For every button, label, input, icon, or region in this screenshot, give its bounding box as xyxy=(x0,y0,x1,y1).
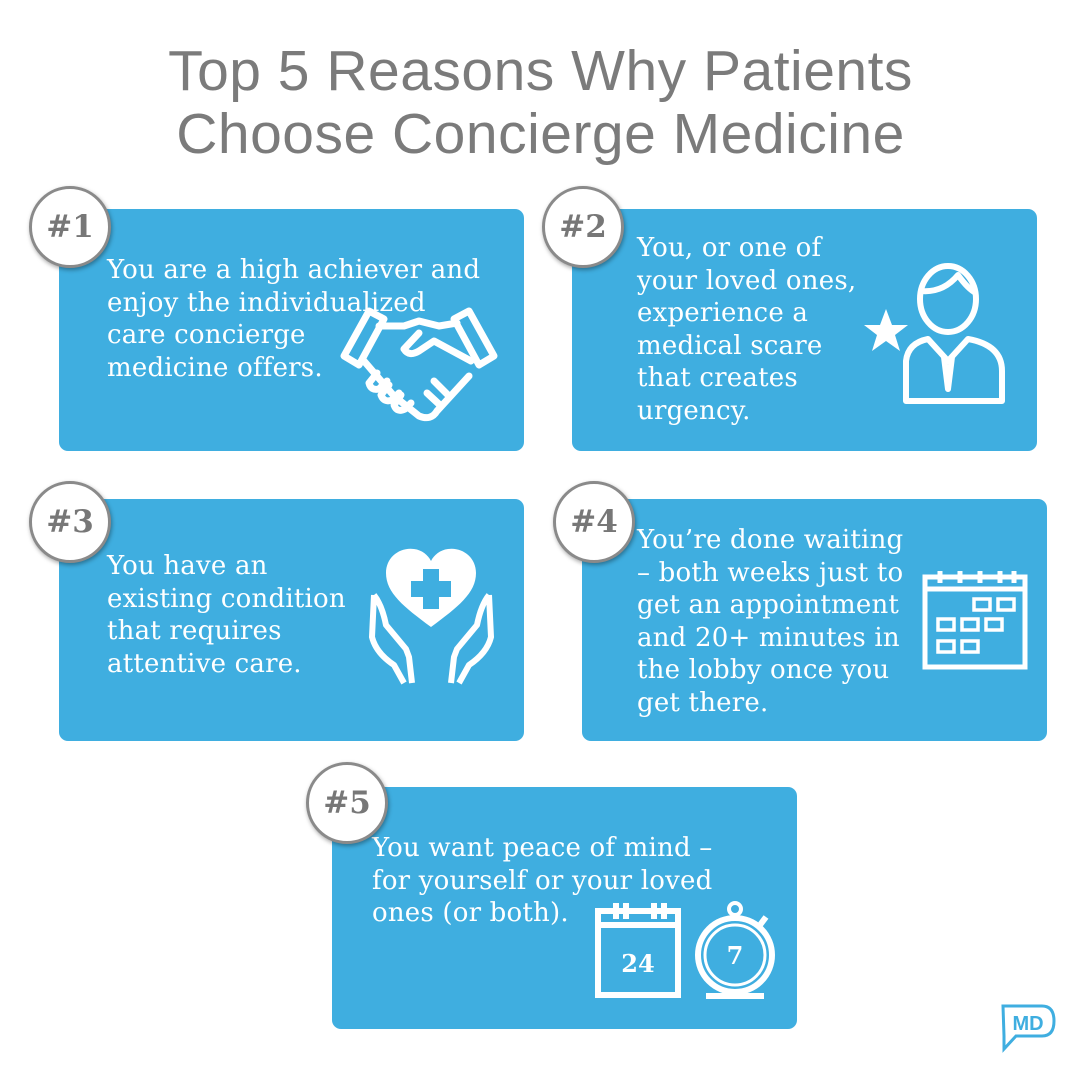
badge #2 xyxy=(542,186,624,268)
text: reason 5: ones (or both). xyxy=(372,898,569,928)
badge #5 xyxy=(306,762,388,844)
text: reason 4: the lobby once you xyxy=(637,655,889,685)
panel: reason 3 xyxy=(59,499,524,741)
badge #1 xyxy=(29,186,111,268)
text: reason 4: and 20+ minutes in xyxy=(637,622,900,652)
text: reason 4: You’re done waiting xyxy=(637,525,903,555)
logo: MD: MD xyxy=(1012,1013,1044,1035)
badge #1: #1 xyxy=(46,209,94,245)
text: reason 1: medicine offers. xyxy=(107,352,323,382)
text: reason 4: get an appointment xyxy=(637,590,899,620)
text: reason 3 xyxy=(106,551,346,678)
logo: MD xyxy=(1001,1004,1056,1053)
text: reason 4: get there. xyxy=(637,688,768,718)
panel: reason 4 xyxy=(582,499,1047,741)
text: reason 2: urgency. xyxy=(637,396,751,426)
text: reason 4 xyxy=(636,525,903,718)
icon: calendar xyxy=(922,571,1028,670)
badge #3: #3 xyxy=(46,504,94,540)
title xyxy=(168,39,913,166)
badge #4 xyxy=(553,481,635,563)
text: reason 5: You want peace of mind – xyxy=(372,833,712,863)
text: reason 3: existing condition xyxy=(107,584,346,614)
text: reason 5: for yourself or your loved xyxy=(372,866,712,896)
text: reason 2 xyxy=(636,233,856,426)
text: reason 2: medical scare xyxy=(637,330,822,360)
text: reason 1: care concierge xyxy=(107,320,306,350)
text: reason 2: your loved ones, xyxy=(637,266,856,296)
badge #5: #5 xyxy=(323,785,371,821)
text: reason 3: attentive care. xyxy=(107,648,302,678)
panel: reason 1 xyxy=(59,209,524,451)
icon: 24/7 calendar and stopwatch: 7 xyxy=(727,941,743,970)
badge #3 xyxy=(29,481,111,563)
icon: heart in hands xyxy=(369,548,494,684)
badge #2: #2 xyxy=(559,209,607,245)
text: reason 3: that requires xyxy=(107,616,282,646)
icon: handshake xyxy=(340,308,498,422)
text: reason 2: You, or one of xyxy=(637,233,821,263)
title: Top 5 Reasons Why Patients xyxy=(168,39,913,103)
icon: 24/7 calendar and stopwatch: 24 xyxy=(621,949,655,978)
text: reason 1: You are a high achiever and xyxy=(107,255,480,285)
text: reason 1 xyxy=(106,255,480,382)
badge #4: #4 xyxy=(570,504,618,540)
panel: reason 2 xyxy=(572,209,1037,451)
text: reason 5 xyxy=(372,833,712,928)
text: reason 2: experience a xyxy=(637,298,808,328)
text: reason 4: – both weeks just to xyxy=(637,558,903,588)
title: Choose Concierge Medicine xyxy=(176,102,905,166)
panel: reason 5 xyxy=(332,787,797,1029)
text: reason 3: You have an xyxy=(107,551,268,581)
text: reason 1: enjoy the individualized xyxy=(107,288,426,318)
icon: 24/7 calendar and stopwatch xyxy=(595,901,775,999)
icon: person with star xyxy=(864,263,1005,404)
text: reason 2: that creates xyxy=(637,363,798,393)
